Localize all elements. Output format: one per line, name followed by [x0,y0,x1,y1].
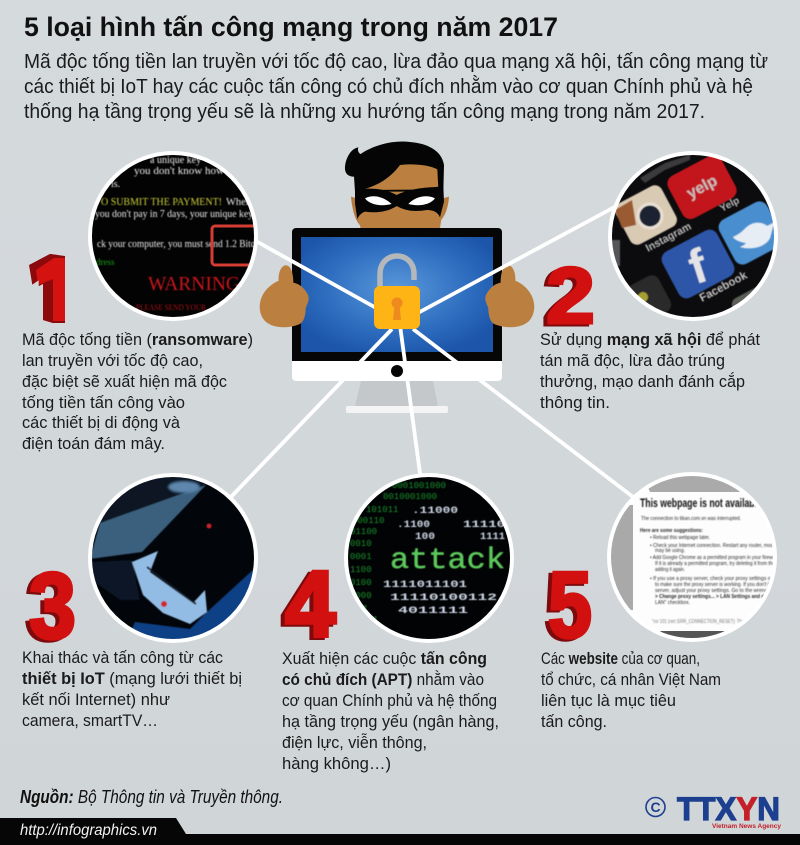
text block 3: Khai thác và tấn công từ các [22,648,223,667]
photo 4: attack code: 11110100112 [390,593,497,604]
logo: TTXVN [646,791,781,830]
text block 1: tống tiền tấn công vào [22,393,185,412]
photo 1: ransomware screen: ck your computer, you must send 1.2 Bitc [97,239,255,250]
intro text [24,50,768,123]
text block 2: thông tin. [540,393,610,412]
photo 2: social media apps: Facebook [698,269,750,305]
number 2: 2 [542,253,591,342]
text block 1: Mã độc tống tiền (ransomware) [22,330,253,349]
photo 1: ransomware screen [88,151,272,321]
photo 2: social media apps: Instagram [644,220,694,255]
photo 4: attack code: 100 [415,532,435,543]
hacker face [356,187,443,228]
text block 5: tấn công. [541,712,607,731]
photo 5: webpage error: If it is already a permitted program, try deleting it from the [655,561,775,567]
number 1: 1 [25,233,75,345]
photo 2: social media apps [608,151,778,321]
website url: http://infographics.vn [20,822,157,839]
computer stand [346,381,448,413]
number 1 [29,254,65,323]
text block 4: Xuất hiện các cuộc tấn công [282,649,487,668]
text block 4: hàng không…) [282,754,391,773]
photo 4: attack code: .11000 [412,506,458,517]
icon: padlock [374,256,420,329]
text block 4: có chủ đích (APT) nhằm vào [282,670,484,689]
hacker forehead [360,164,438,190]
text block 5: liên tục là mục tiêu [541,691,676,710]
photo 5: webpage error: server, adjust your proxy settings. Go to the wrench r [655,588,773,594]
hacker mask [355,187,444,219]
photo 4: attack code: 0010001000 [383,492,437,502]
intro text: Mã độc tống tiền lan truyền với tốc độ cao, lừa đảo qua mạng xã hội, tấn công mạng từ [24,50,768,73]
photo 5: webpage error: to make sure the proxy server is working. If you don't be [655,582,773,588]
text block 3: camera, smartTV… [22,711,158,730]
photo 4: attack code: 0100 [350,578,372,588]
text block 3: thiết bị IoT (mạng lưới thiết bị [22,669,242,688]
connector lines [229,203,637,500]
photo 5: webpage error: LAN" checkbox. [655,600,690,606]
photo 2: social media apps: Yelp [718,195,742,215]
photo 1: ransomware screen: you don't know how [134,166,224,177]
photo 4: attack code: attack [390,544,505,578]
photo 1: ransomware screen: When [226,197,252,208]
number 1: 1 [25,233,75,345]
hacker figure [345,142,449,228]
logo wordmark: TTXYN [677,791,780,827]
text block 5: Các website của cơ quan, [541,649,700,668]
title: 5 loại hình tấn công mạng trong năm 2017 [24,12,558,42]
photo 1: ransomware screen: you don't pay in 7 days, your unique key [95,209,254,220]
intro text: các thiết bị IoT hay các cuộc tấn công có chủ đích nhằm vào cơ quan Chính phủ và hệ [24,75,753,98]
logo copyright mark: C [650,799,661,815]
number 2: 2 [546,251,595,340]
photo 4: attack code: 0000 [350,591,372,601]
photo 4: attack code: 101011 [366,505,398,515]
number 5: 5 [544,554,588,659]
hands [260,265,534,327]
source note: Nguồn: Bộ Thông tin và Truyền thông. [20,787,283,807]
photo 4: attack code: 0010 [350,539,372,549]
photo 5: webpage error: > Change proxy settings... > LAN Settings and de [655,594,767,600]
photo 4: attack code: 101 [352,604,368,614]
photo 2: social media apps: yelp [684,172,721,202]
photo 4: attack code: 1100 [350,565,372,575]
text block 2 [540,330,760,412]
text block 5: tổ chức, cá nhân Việt Nam [541,670,721,689]
photo 4: attack code: 000110 [352,516,384,526]
photo 1: ransomware screen: O SUBMIT THE PAYMENT! [101,197,222,208]
photo 4: attack code: .1100 [397,520,430,531]
photo 4: attack code: 0001001000 [392,481,446,491]
photo 5: webpage error: "ror 101 (net::ERR_CONNECTION_RESET): The [652,619,744,625]
photo 5: webpage error: adding it again. [655,567,685,573]
footer bar [0,818,800,845]
hacker ears [351,197,449,226]
photo 4: attack code: 1111 [480,532,505,543]
hacker hair [345,142,444,192]
text block 4 [282,649,499,773]
text block 2: Sử dụng mạng xã hội để phát [540,330,760,349]
number 3: 3 [25,555,72,660]
text block 3 [22,648,242,730]
photo 5: webpage error: • Check your Internet connection. Restart any router, mode [650,543,776,549]
computer monitor [292,228,502,368]
text block 4: hạ tầng trọng yếu (ngân hàng, [282,712,499,731]
monitor chin [292,361,502,381]
photo 4: attack code: 01100 [350,527,377,537]
text block 2: tán mã độc, lừa đảo trúng [540,351,725,370]
photo 2: social media apps: f [682,239,715,295]
text block 3: kết nối Internet) như [22,690,170,709]
photo 1: ransomware screen: WARNING [148,273,240,295]
photo 5: webpage error: • If you use a proxy server, check your proxy settings or c [650,576,776,582]
photo 5: webpage error: • Add Google Chrome as a permitted program in your firewal [650,555,776,561]
photo 4: attack code: 001 [362,615,378,625]
photo 4: attack code: 1111011101 [383,580,467,591]
text block 4: điện lực, viễn thông, [282,733,427,752]
photo 5: webpage error: • Reload this webpage later. [650,535,710,541]
photo 1: ransomware screen: a unique key [150,155,201,166]
photo 3: IoT camera device [88,470,262,645]
number 4: 4 [281,553,332,658]
photo 5: webpage error: The connection to tikan.com.vn was interrupted. [641,516,741,522]
photo 4: attack code: 0001 [350,552,372,562]
photo 5: webpage error: This webpage is not availab. [640,496,757,510]
photo 4: attack code: 4011111 [398,606,468,617]
photo 5: webpage error: may be using. [655,548,685,554]
text block 1: lan truyền với tốc độ cao, [22,351,203,370]
photo 1: ransomware screen: is. [111,179,120,190]
text block 1: các thiết bị di động và [22,413,181,432]
photo 5: webpage error [607,470,777,642]
intro text: thống hạ tầng trọng yếu sẽ là những xu hướng tấn công mạng trong năm 2017. [24,100,705,123]
text block 5 [541,649,721,731]
logo tagline: Vietnam News Agency [712,823,781,830]
photo 1: ransomware screen: dress [96,257,115,267]
photo 1: ransomware screen: PLEASE SEND YOUR [136,303,207,312]
photo 4: attack code: 11110 [463,520,505,531]
number 5: 5 [548,552,592,657]
mask eyes [365,196,435,205]
number 3: 3 [29,553,76,658]
photo 4: attack code [345,474,515,644]
number 4: 4 [285,551,336,656]
text block 2: thưởng, mạo danh đánh cắp [540,372,745,391]
photo 5: webpage error: Here are some suggestions: [640,528,703,534]
text block 1: đặc biệt sẽ xuất hiện mã độc [22,372,227,391]
text block 1 [22,330,253,453]
text block 1: điện toán đám mây. [22,434,165,453]
text block 4: cơ quan Chính phủ và hệ thống [282,691,497,710]
